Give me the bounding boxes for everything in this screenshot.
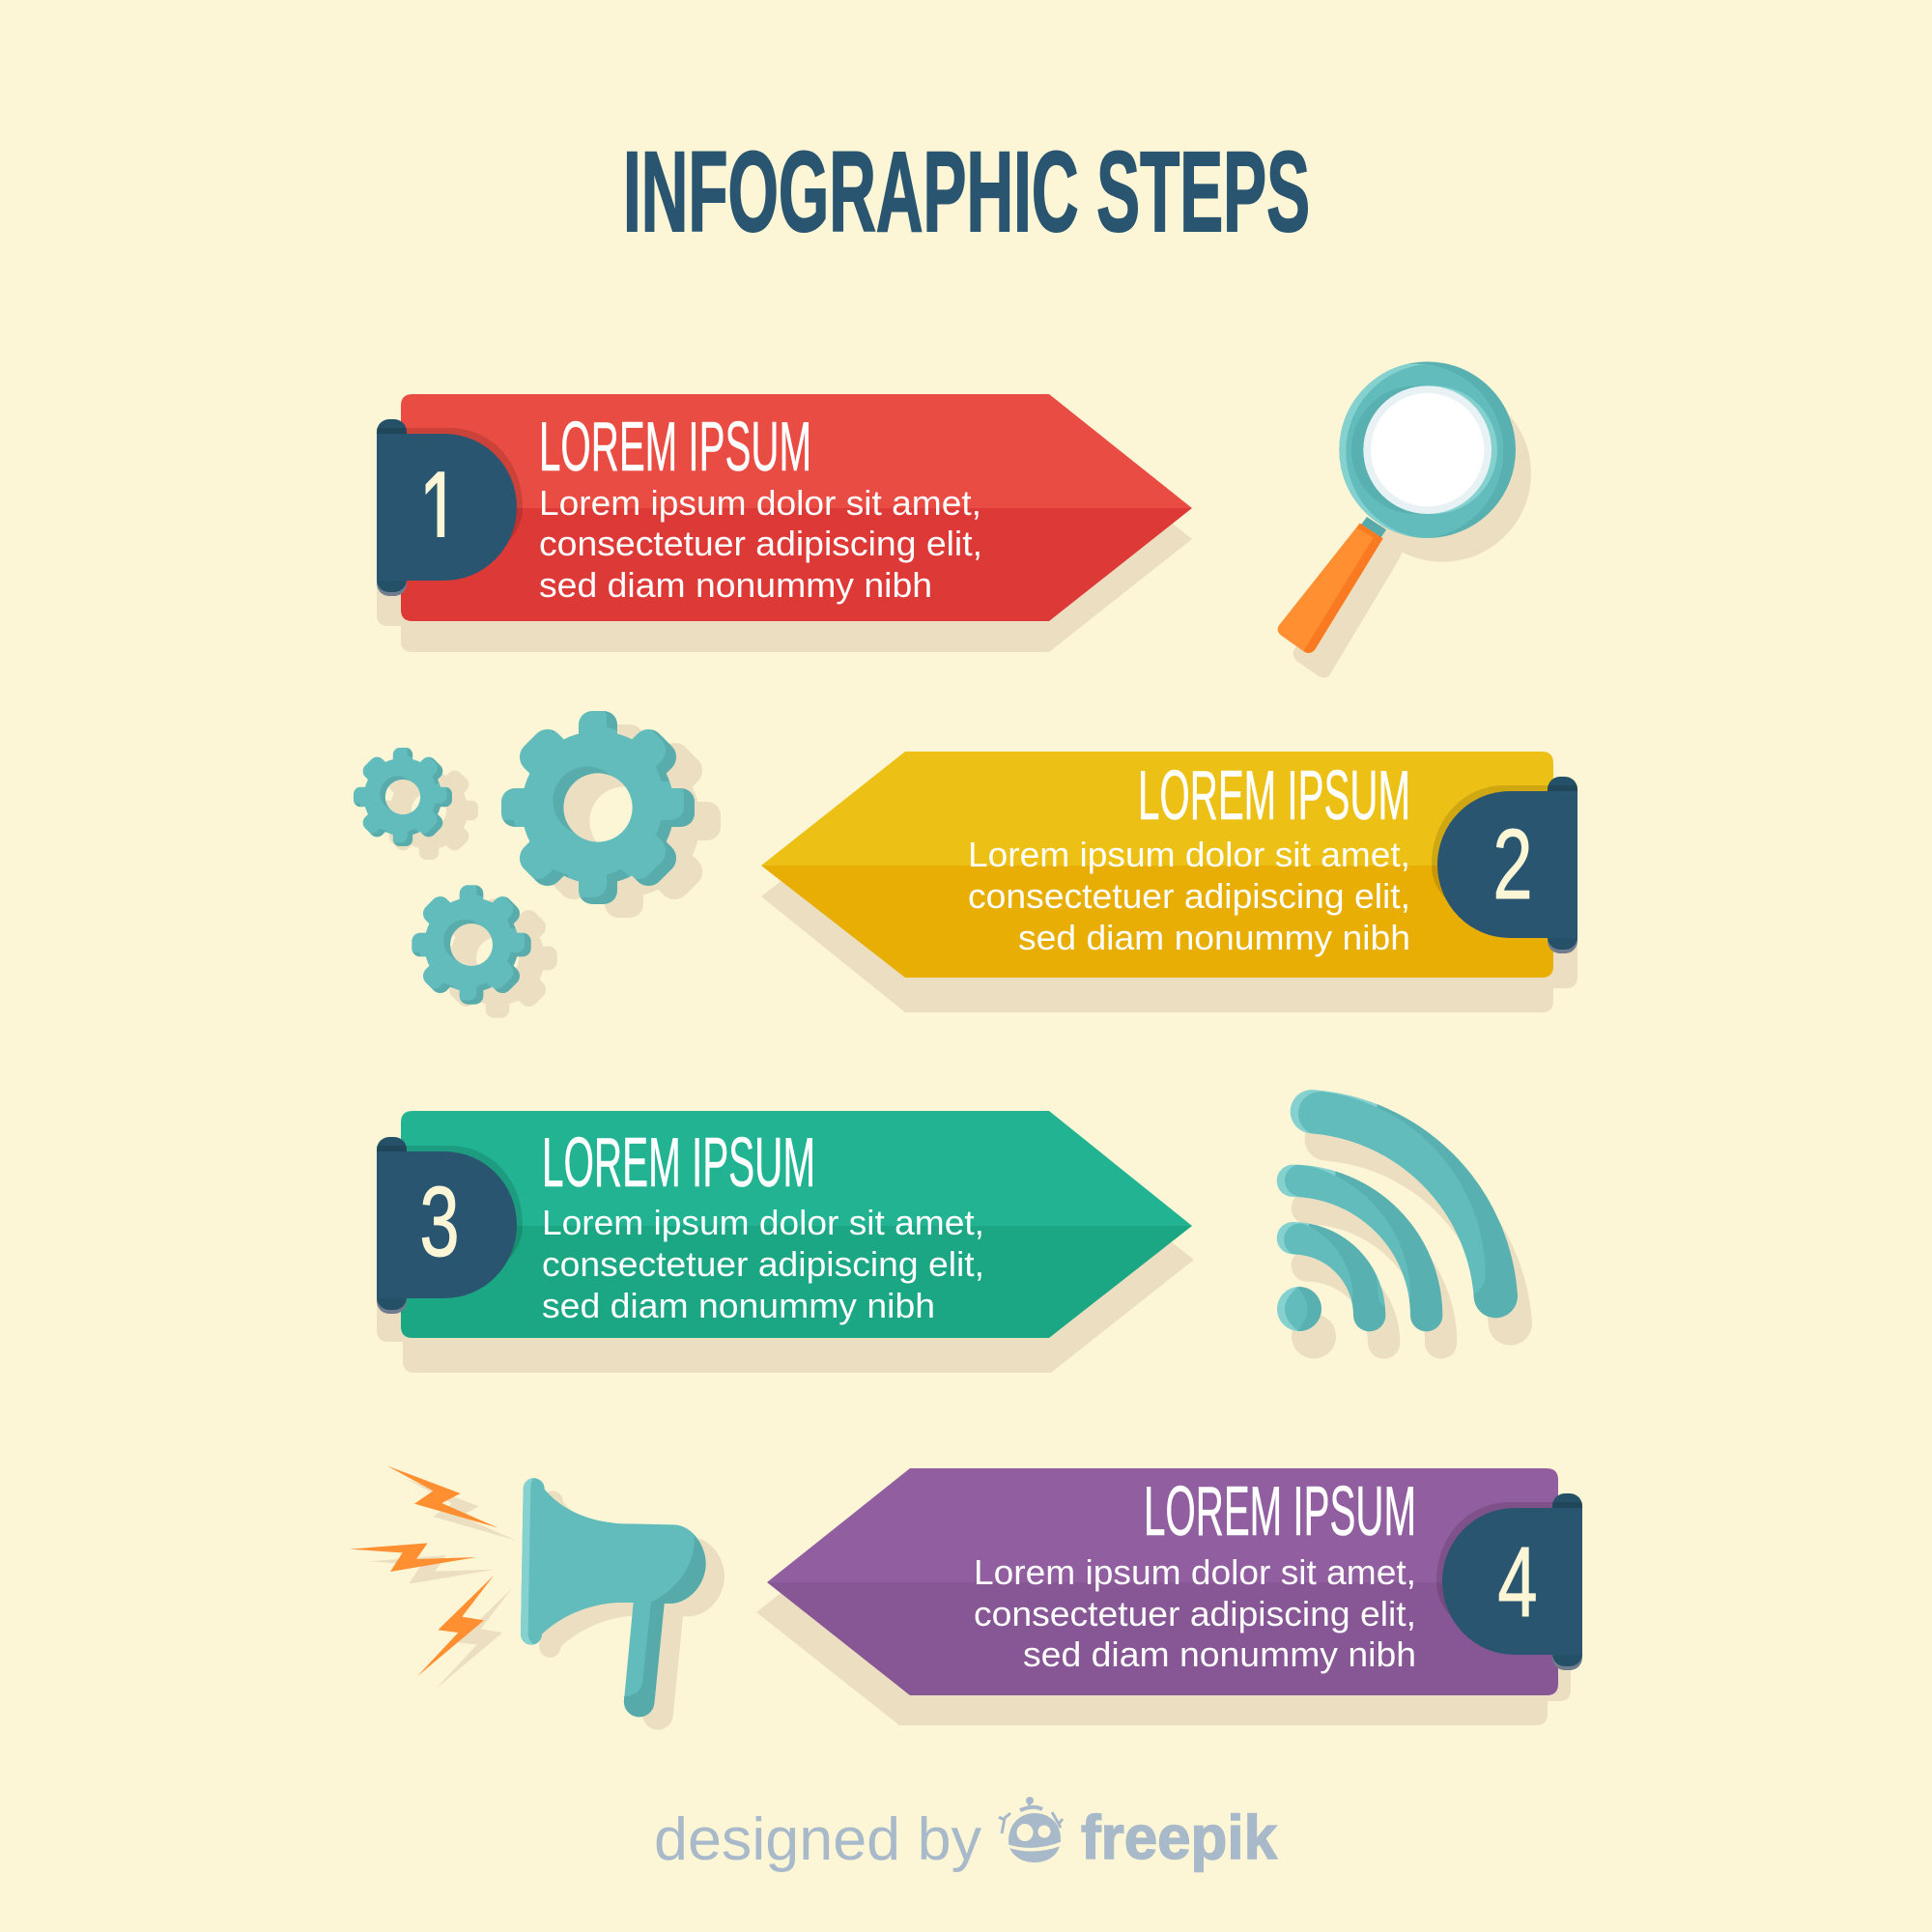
badge: number 2 [1432,777,1577,953]
heading: step 3: LOREM IPSUM [542,1124,815,1202]
icon: wifi signal [1277,1090,1532,1358]
text block: step 2: sed diam nonummy nibh [1018,918,1410,957]
text block: step 2 [968,835,1410,957]
text block: step 4: consectetuer adipiscing elit, [974,1594,1416,1634]
text block: step 3: sed diam nonummy nibh [542,1286,935,1325]
icon: magnifying glass [1278,361,1531,678]
text block: step 3: consectetuer adipiscing elit, [542,1244,984,1284]
icon: three gears [333,675,750,1036]
title: INFOGRAPHIC STEPS [623,128,1310,256]
badge: number 3 [377,1137,523,1314]
icon: megaphone with lightning bolts [350,1465,724,1730]
text block: step 3 [542,1203,984,1325]
panel: step 1 red arrow banner [377,394,1192,652]
text block: step 4 [974,1552,1416,1674]
panel: step 4 purple arrow banner [756,1468,1582,1725]
badge: number 1: 1 [419,447,460,573]
badge: number 4 [1436,1493,1582,1670]
text block: step 4: sed diam nonummy nibh [1023,1634,1416,1674]
badge: number 2: 2 [1492,810,1533,921]
heading: step 1: LOREM IPSUM [539,409,811,486]
heading: step 4: LOREM IPSUM [1144,1473,1416,1550]
text block: step 1: consectetuer adipiscing elit, [539,524,982,563]
text block: step 1: Lorem ipsum dolor sit amet, [539,483,981,523]
panel: step 3 green arrow banner [377,1111,1194,1373]
footer text: freepik: freepik [1081,1803,1277,1872]
text block: step 3: Lorem ipsum dolor sit amet, [542,1203,984,1242]
badge: number 4: 4 [1497,1527,1538,1638]
badge: number 3: 3 [419,1167,460,1278]
footer text: designed by: designed by [654,1806,981,1873]
panel: step 2 yellow arrow banner [761,752,1577,1012]
text block: step 2: Lorem ipsum dolor sit amet, [968,835,1410,874]
icon: freepik mascot [999,1797,1063,1862]
text block: step 2: consectetuer adipiscing elit, [968,876,1410,916]
footer: designed by freepik [654,1797,1277,1873]
heading: step 2: LOREM IPSUM [1138,757,1410,835]
text block: step 1: sed diam nonummy nibh [539,565,932,605]
text block: step 1 [539,483,982,605]
text block: step 4: Lorem ipsum dolor sit amet, [974,1552,1416,1592]
badge: number 1 [377,419,523,596]
